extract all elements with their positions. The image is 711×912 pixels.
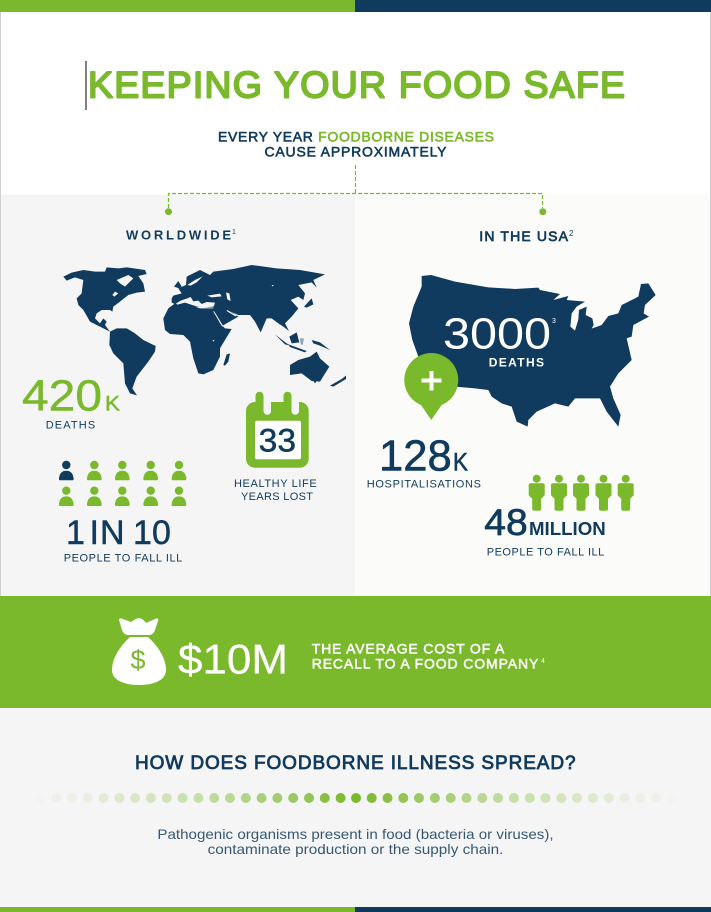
- map: the Americas: [63, 267, 156, 395]
- text: average recall cost: THE AVERAGE COST OF A: [312, 640, 505, 656]
- label: healthy life years lost: [234, 478, 317, 503]
- stat: 1 in 10 people to fall ill: PEOPLE TO FALL ILL: [64, 553, 182, 565]
- stat: 420K deaths: DEATHS: [46, 420, 95, 432]
- heading: worldwide: WORLDWIDE: [126, 227, 231, 242]
- icon: green plus map pin: [404, 353, 458, 420]
- text: average recall cost: 4: [541, 658, 545, 665]
- stat: 48 million people to fall ill: MILLION: [529, 519, 606, 539]
- subtitle: CAUSE APPROXIMATELY: [264, 144, 447, 160]
- text: pathogen explanation: [157, 826, 554, 857]
- dotted fading divider: [36, 793, 677, 803]
- stat: 1 in 10 people to fall ill: [64, 514, 182, 565]
- world map: [63, 265, 346, 395]
- stat: 48 million people to fall ill: 48: [484, 502, 528, 543]
- stat: 1 in 10 people to fall ill: 0: [152, 514, 171, 552]
- text: average recall cost: [312, 640, 545, 671]
- stat: 48 million people to fall ill: [484, 502, 606, 559]
- icon: money bag: [112, 618, 166, 685]
- panel: how illness spreads background: [0, 708, 711, 907]
- stat: 48 million people to fall ill: PEOPLE TO FALL ILL: [487, 547, 604, 559]
- label: healthy life years lost: HEALTHY LIFE: [234, 478, 317, 490]
- stat: 420K deaths: K: [105, 393, 120, 416]
- stat: 1 in 10 people to fall ill: 1: [66, 514, 85, 552]
- text: pathogen explanation: contaminate production or the supply chain.: [208, 841, 503, 857]
- icon: calendar 33: 33: [259, 423, 296, 459]
- stat: 128K hospitalisations: K: [453, 449, 468, 477]
- icon: ten people, one highlighted: [59, 461, 186, 506]
- panel: recall cost band: [0, 596, 711, 708]
- stat: 128K hospitalisations: HOSPITALISATIONS: [367, 479, 481, 491]
- dashed connector with two end dots: [165, 165, 546, 215]
- label: healthy life years lost: YEARS LOST: [241, 491, 313, 503]
- icon: calendar 33: [246, 392, 309, 468]
- subtitle: EVERY YEAR FOODBORNE DISEASES: [218, 129, 494, 145]
- stat: 3000 deaths: DEATHS: [489, 356, 544, 370]
- stat: 420K deaths: 420: [22, 372, 102, 421]
- text: average recall cost: RECALL TO A FOOD COMPANY: [312, 655, 539, 671]
- icon: money bag: $: [130, 645, 146, 675]
- panel: worldwide background: [0, 194, 355, 596]
- heading: in the USA: IN THE USA: [479, 228, 569, 244]
- stat: 1 in 10 people to fall ill: I: [90, 514, 99, 552]
- USA map: [409, 275, 656, 427]
- subtitle: [218, 129, 494, 160]
- heading: worldwide: 1: [232, 229, 236, 236]
- stat: 128K hospitalisations: [367, 432, 481, 491]
- top colour bar: [0, 0, 711, 12]
- panel: USA background: [355, 194, 711, 596]
- stat: 3000 deaths: 3000: [443, 310, 551, 359]
- stat: 420K deaths: [22, 372, 120, 432]
- stat: 128K hospitalisations: 128: [379, 432, 452, 481]
- stat: 1 in 10 people to fall ill: N: [100, 514, 125, 552]
- heading: how does foodborne illness spread: HOW DOES FOODBORNE ILLNESS SPREAD?: [135, 753, 576, 774]
- icon: five green people: [529, 475, 634, 511]
- map: Europe, Asia, Africa, Australia: [163, 265, 346, 387]
- bottom colour bar: [0, 907, 711, 912]
- title: KEEPING YOUR FOOD SAFE: [88, 64, 625, 106]
- text: pathogen explanation: Pathogenic organisms present in food (bacteria or viruses),: [157, 826, 554, 842]
- stat: $10M: $10M: [178, 635, 288, 682]
- heading: in the USA: 2: [569, 229, 574, 238]
- stat: 1 in 10 people to fall ill: 1: [133, 514, 152, 552]
- stat: 3000 deaths: 3: [552, 318, 556, 325]
